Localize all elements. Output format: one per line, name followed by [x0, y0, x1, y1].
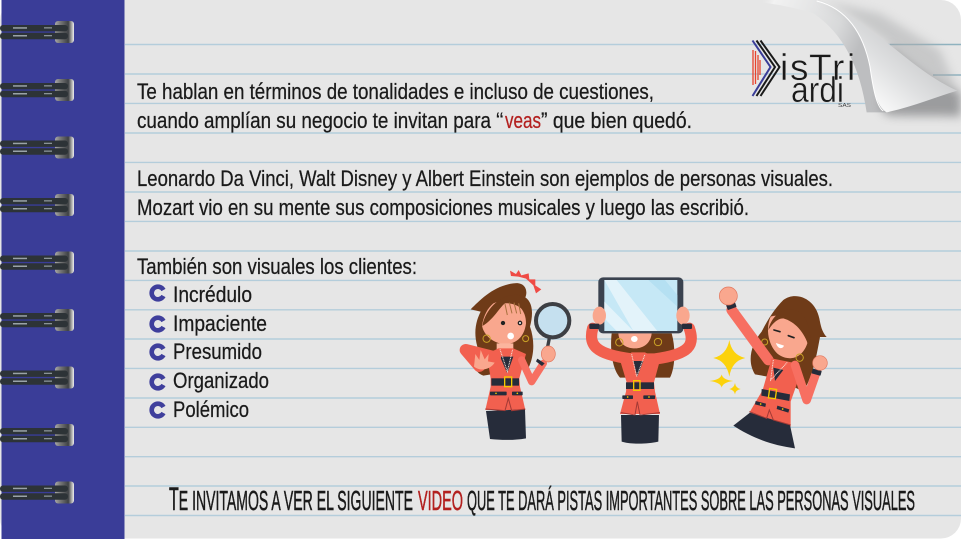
bullet icon	[152, 287, 164, 299]
bullet list	[152, 282, 269, 422]
text block: list heading: También son visuales los clientes:	[137, 254, 417, 279]
blue binding strip	[2, 0, 124, 539]
bullet list: Incrédulo	[173, 282, 252, 307]
text block: tonalidades	[137, 79, 692, 133]
text block: ejemplos	[137, 166, 833, 220]
illustration: happy woman with sparkles	[709, 287, 827, 448]
closing call to action	[169, 481, 915, 517]
spiral rings	[0, 21, 74, 504]
text block: ejemplos: Mozart vio en su mente sus composiciones musicales y luego las escribió.	[137, 195, 749, 220]
text block: tonalidades: ” que bien quedó.	[541, 108, 692, 133]
closing call to action: TE INVITAMOS A VER EL SIGUIENTE	[169, 481, 413, 517]
bullet icon	[152, 318, 164, 330]
logo: Distri Ardi SAS: SAS	[838, 103, 852, 109]
closing call to action: VIDEO	[418, 485, 463, 516]
ruled lines	[125, 44, 961, 516]
bullet list: Polémico	[173, 397, 249, 422]
logo: Distri Ardi SAS: ardi	[791, 69, 844, 110]
illustration: woman holding tablet	[589, 277, 692, 444]
bullet icon	[152, 404, 164, 416]
logo: Distri Ardi SAS: isTri	[780, 47, 855, 88]
bullet icon	[152, 376, 164, 388]
logo: Distri Ardi SAS	[752, 40, 855, 110]
text block: tonalidades: veas	[505, 108, 541, 133]
bullet list: Organizado	[173, 368, 269, 393]
text block: tonalidades: “	[496, 108, 504, 133]
text block: tonalidades: Te hablan en términos de tonalidades e incluso de cuestiones,	[137, 79, 654, 104]
illustration: woman with magnifying glass	[466, 270, 569, 440]
bullet list: Presumido	[173, 339, 262, 364]
page curl	[771, 0, 961, 122]
text block: tonalidades: cuando amplían su negocio te invitan para	[137, 108, 491, 133]
bullet list: Impaciente	[173, 311, 267, 336]
bullet icon	[152, 346, 164, 358]
text block: ejemplos: Leonardo Da Vinci, Walt Disney y Albert Einstein son ejemplos de personas visuales.	[137, 166, 833, 191]
